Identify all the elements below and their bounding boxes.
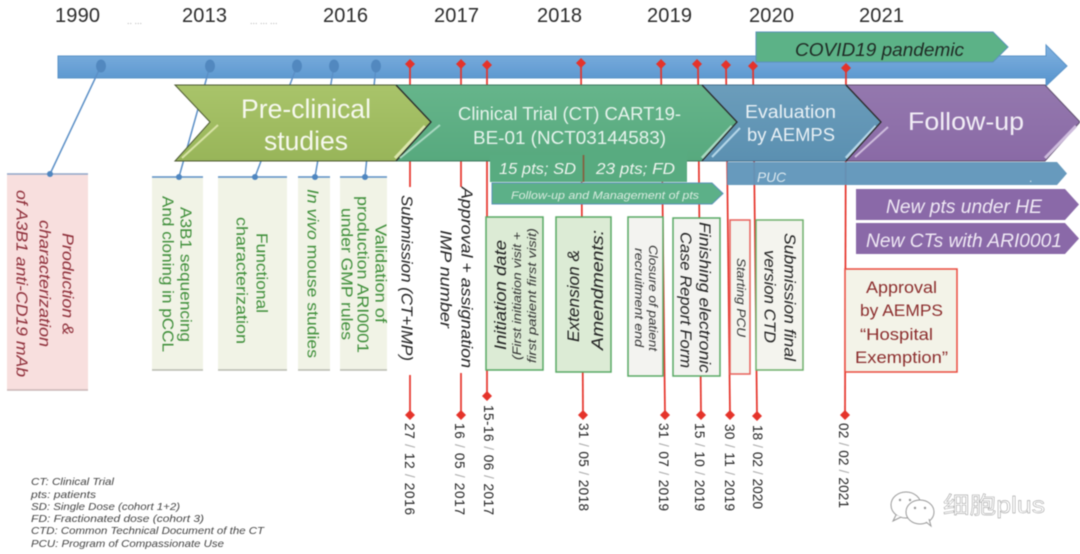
chevron: Follow-up: Follow-up <box>908 108 1024 136</box>
bar: PUC: . <box>1029 171 1032 185</box>
bar: PUC <box>727 162 1067 185</box>
panel: Functional characterization <box>218 174 287 370</box>
cohort: 15 pts SD <box>490 155 584 182</box>
milestone dates: 02 / 02 / 2021 <box>836 423 851 508</box>
panel: Validation of production: under GMP rules <box>338 208 354 340</box>
label: Approval and assignation: IMP number <box>436 230 454 329</box>
legend: PCU: Program of Compassionate Use <box>31 538 224 550</box>
milestone dates: 16 / 05 / 2017 <box>452 423 467 515</box>
chevron: Evaluation by AEMPS <box>702 85 881 161</box>
legend: pts: patients <box>30 489 97 501</box>
chevron: Pre-clinical studies: studies <box>264 126 348 156</box>
legend: FD: Fractionated dose (cohort 3) <box>31 513 204 525</box>
panel: In vivo mouse studies: In vivo mouse studies <box>304 189 320 358</box>
milestone dates: 31 / 05 / 2018 <box>576 423 591 511</box>
banner: COVID19 pandemic: COVID19 pandemic <box>795 40 964 60</box>
box: Finishing electronic Case Report Form: Finishing electronic <box>696 222 712 373</box>
panel: Functional characterization: characterization <box>232 217 250 344</box>
chevron: Clinical Trial <box>396 85 737 161</box>
box: Closure of patient recruitment: Closure of patient <box>646 245 660 352</box>
panel: Validation of production: Validation of <box>372 224 388 324</box>
panel: Validation of production <box>338 174 388 370</box>
box: Initiation date: (First initiation visit + <box>510 232 524 360</box>
chevron: Clinical Trial: Clinical Trial (CT) CART19- <box>458 104 681 124</box>
legend: CTD: Common Technical Document of the CT <box>31 525 266 537</box>
icon: chat bubbles watermark <box>891 492 934 526</box>
box: Extension and Amendments <box>556 217 611 372</box>
year labels: 1990 <box>55 5 100 27</box>
box: Initiation date: first patient first visit) <box>525 228 539 363</box>
legend <box>30 476 266 550</box>
box: Submission final version CTD: Submission final <box>780 233 798 361</box>
red milestone lines <box>410 64 846 415</box>
legend: SD: Single Dose (cohort 1+2) <box>31 501 180 513</box>
panel: A3B1 sequencing: A3B1 sequencing <box>176 207 194 342</box>
chevron: Clinical Trial: BE-01 (NCT03144583) <box>473 128 666 148</box>
panel: A3B1 sequencing: And cloning in pCCL <box>158 196 176 352</box>
year labels: 2013 <box>182 5 227 27</box>
box: Starting PCU <box>730 220 750 374</box>
bar: New CTs with ARI0001 <box>856 223 1079 254</box>
panel: 1990 production note <box>7 171 88 390</box>
panel: In vivo mouse studies <box>298 174 330 370</box>
cohort: 15 pts SD: 15 pts; SD <box>499 161 576 178</box>
box: Initiation date: Initiation date <box>491 240 510 350</box>
year labels: 2016 <box>323 5 368 27</box>
milestone dates: 15-16 / 06 / 2017 <box>481 405 496 515</box>
blue connector lines <box>50 66 376 177</box>
cohort: 23 pts FD: 23 pts; FD <box>595 161 675 178</box>
panel: Validation of production: production ARI0001 <box>354 196 370 353</box>
panel: 1990 production note: Production & <box>58 233 76 335</box>
box: Approval by AEMPS Hospital Exemption <box>845 269 957 372</box>
bar: New pts under HE <box>856 189 1079 220</box>
chevron: Evaluation by AEMPS: Evaluation <box>745 102 836 122</box>
year labels: 2017 <box>434 5 479 27</box>
panel: Functional characterization: Functional <box>252 233 270 313</box>
box: Submission final version CTD <box>756 220 803 370</box>
panel: 1990 production note: characterization <box>36 220 52 347</box>
box: Approval by AEMPS Hospital Exemption: “Hospital <box>860 325 933 344</box>
milestone dates: 30 / 11 / 2019 <box>722 424 737 511</box>
milestone dates: 27 / 12 / 2016 <box>402 423 417 515</box>
year labels: .. ... <box>127 16 142 26</box>
milestone dates: 31 / 07 / 2019 <box>656 423 671 511</box>
panel: 1990 production note: of A3B1 anti-CD19 mAb <box>12 190 30 377</box>
year labels: 2021 <box>859 5 904 27</box>
chevron: Evaluation by AEMPS: by AEMPS <box>747 125 835 145</box>
bar: Follow-up and Management of pts: Follow-up and Management of pts <box>511 190 700 202</box>
box: Starting PCU: Starting PCU <box>734 258 748 337</box>
red date diamonds <box>405 391 850 421</box>
box: Extension and Amendments: Extension & <box>564 250 583 342</box>
chevron: Pre-clinical studies <box>175 85 431 161</box>
panel: A3B1 sequencing <box>152 174 203 370</box>
timeline arrow <box>58 45 1067 86</box>
label: Approval and assignation: Approval + assignation <box>458 186 474 368</box>
timeline markers <box>96 58 758 72</box>
year labels: 2018 <box>537 5 582 27</box>
label: Submission: Submission (CT+IMP) <box>398 195 414 361</box>
bar: Follow-up and Management of pts <box>492 183 723 204</box>
box: Finishing electronic Case Report Form <box>673 218 720 376</box>
watermark text: 细胞plus <box>943 492 1045 518</box>
box: Submission final version CTD: version CTD <box>760 250 778 343</box>
milestone dates: 18 / 02 / 2020 <box>750 425 765 509</box>
bar: New CTs with ARI0001: New CTs with ARI0001 <box>866 231 1062 252</box>
cohort: 23 pts FD <box>584 150 687 182</box>
box: Finishing electronic Case Report Form: Case Report Form <box>676 232 694 368</box>
year labels: 2020 <box>749 5 794 27</box>
chevron: Follow-up <box>846 85 1080 161</box>
box: Approval by AEMPS Hospital Exemption: by AEMPS <box>860 301 943 320</box>
marker: 2021 milestone <box>841 63 851 73</box>
year labels: ... ... ... <box>250 16 278 26</box>
box: Approval by AEMPS Hospital Exemption: Exemption” <box>855 348 948 367</box>
label: Approval and assignation <box>436 186 474 368</box>
bar: PUC: PUC <box>757 169 787 185</box>
milestone dates <box>402 405 851 515</box>
banner: COVID19 pandemic <box>756 32 1008 62</box>
legend: CT: Clinical Trial <box>31 476 115 488</box>
box: Closure of patient recruitment: recruitment end <box>632 248 646 347</box>
box: Extension and Amendments: Amendments: <box>588 230 607 351</box>
year labels <box>55 5 904 27</box>
year labels: 2019 <box>647 5 692 27</box>
bar: New pts under HE: New pts under HE <box>886 197 1042 218</box>
milestone dates: 15 / 10 / 2019 <box>692 423 707 511</box>
box: Initiation date <box>486 217 543 370</box>
chevron: Pre-clinical studies: Pre-clinical <box>241 94 371 124</box>
box: Approval by AEMPS Hospital Exemption: Approval <box>866 278 937 297</box>
box: Closure of patient recruitment <box>628 217 663 376</box>
